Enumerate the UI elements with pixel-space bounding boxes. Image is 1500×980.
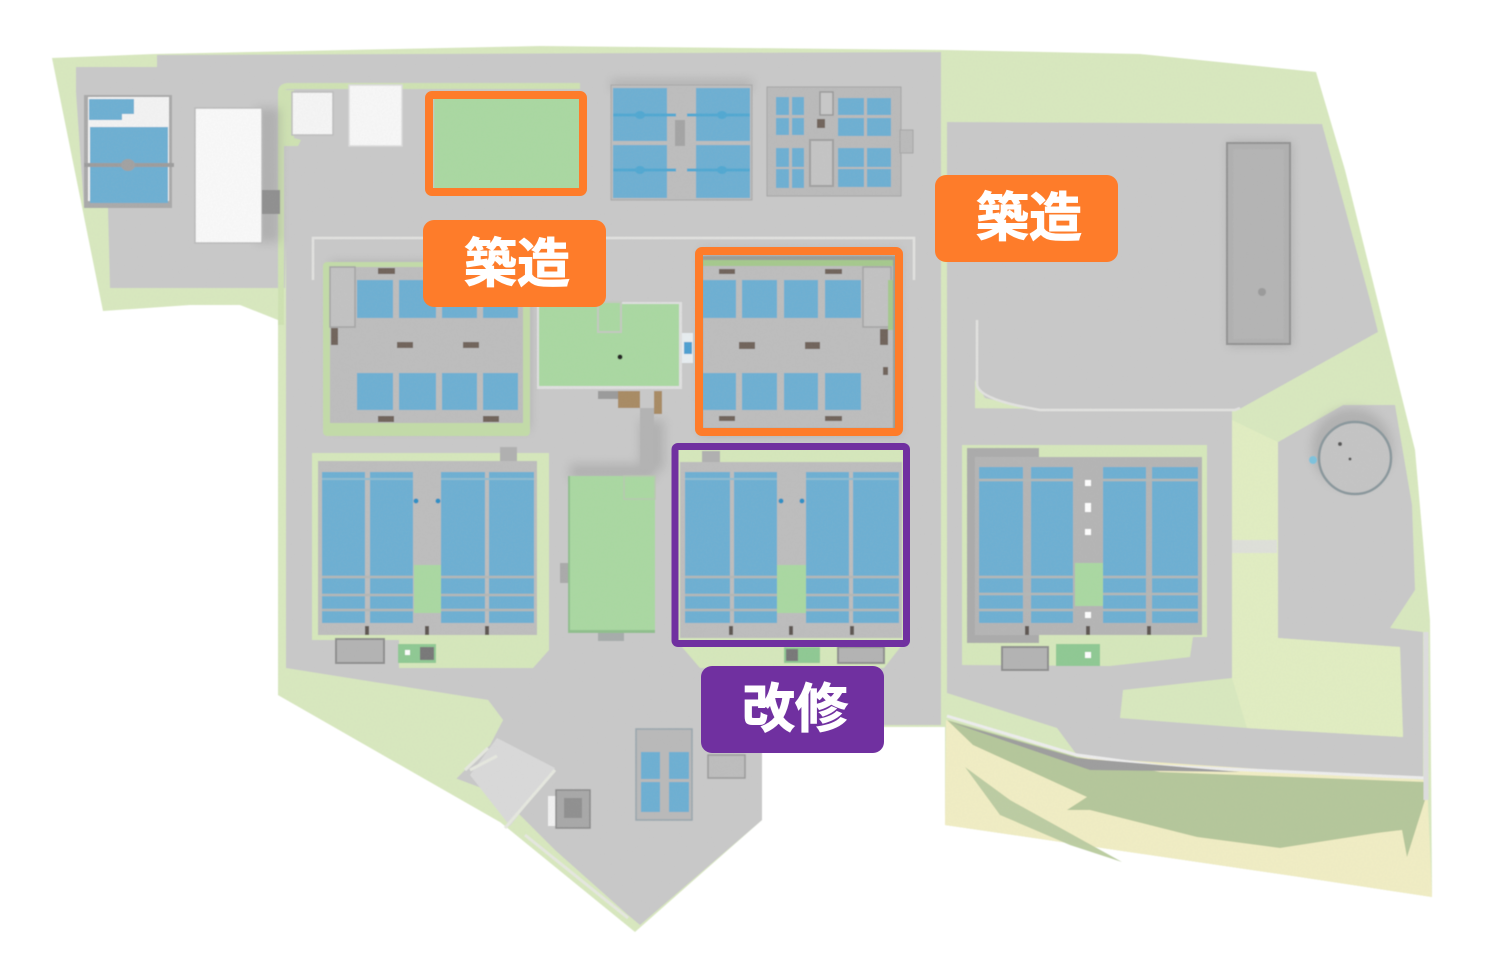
- building: treatment block left: [323, 262, 530, 436]
- label: construction left: [423, 220, 606, 307]
- building: central green roof: [537, 302, 693, 470]
- ground: lower grass corner: [278, 668, 503, 822]
- ground: vertical grass strip: [941, 52, 947, 695]
- frame: new construction north: [429, 95, 583, 192]
- building: small white block: [292, 92, 333, 135]
- ground: grass beside small block: [284, 90, 301, 146]
- label: construction left: 築造: [464, 235, 570, 294]
- ground: south entrance apron: [470, 738, 555, 826]
- building: tall green roof: [560, 476, 655, 641]
- building: circular digestion tank: [1309, 422, 1391, 494]
- ground: east wall: [1424, 632, 1428, 800]
- ground: curb lines: [313, 238, 1240, 410]
- frame: renovation: [675, 446, 906, 644]
- ground: retaining wall shadow: [950, 722, 1240, 772]
- texture grain: [780, 500, 803, 502]
- south entrance path: [465, 748, 628, 918]
- building: green roof new construction north: [434, 96, 580, 190]
- building: white block: [349, 85, 402, 146]
- building: west tank: [84, 95, 174, 208]
- building: compartment tank: [767, 87, 913, 196]
- ground: retaining wall line: [947, 716, 1425, 778]
- ground: crossing path: [1232, 540, 1277, 553]
- ground: hillside vegetation lower: [965, 767, 1122, 862]
- label: renovation: [701, 666, 884, 753]
- ground: main paved area: [76, 52, 941, 925]
- ground: western lot fill: [76, 67, 290, 288]
- building: reactor tank under purple frame: [676, 448, 906, 668]
- ground: perimeter grass strip: [281, 86, 580, 325]
- label: construction right: [935, 175, 1118, 262]
- shadows: [255, 80, 1392, 488]
- building: reactor tank K: [312, 447, 549, 668]
- ground: grass corner north-east: [1232, 332, 1400, 442]
- building: south gatehouse: [548, 790, 590, 828]
- label: construction right: 築造: [976, 189, 1082, 248]
- building: quad tank: [611, 85, 752, 200]
- building: white warehouse: [195, 108, 280, 243]
- frame: new construction central: [699, 251, 899, 432]
- ground: eastern road: [947, 405, 1423, 777]
- ground: eastern paved area: [947, 122, 1378, 410]
- ground: hillside vegetation: [947, 720, 1426, 857]
- building: treatment block under orange frame: [700, 256, 900, 432]
- building: reactor tank east: [962, 445, 1207, 670]
- ground: hillside base: [945, 720, 1432, 897]
- label: renovation: 改修: [742, 680, 848, 739]
- building: south small tank: [636, 729, 745, 820]
- building: long east structure: [1227, 143, 1290, 344]
- ground: grass median: [1232, 420, 1403, 737]
